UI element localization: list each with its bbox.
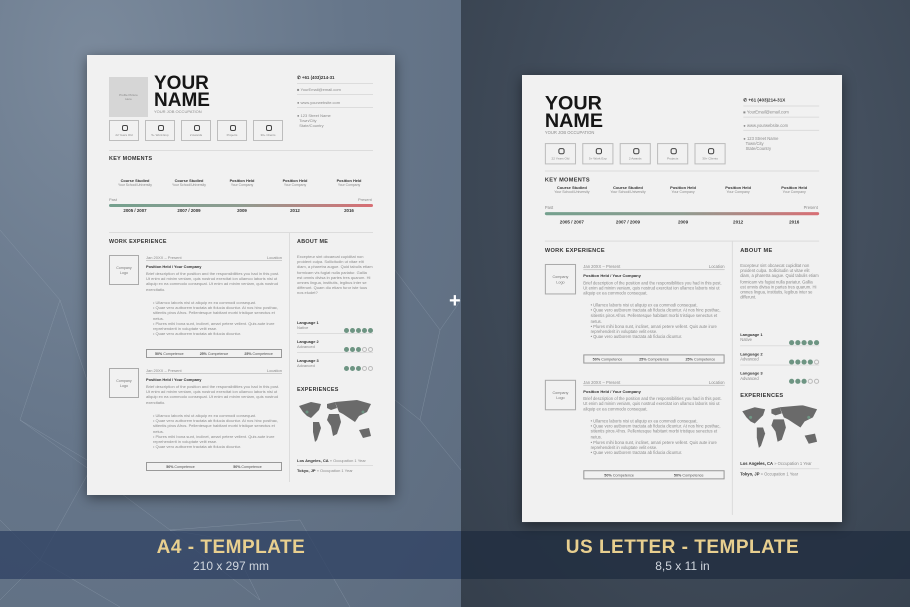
work entry 1: Company — [116, 266, 132, 270]
work entry 2: 50% Competence — [674, 473, 704, 477]
work entry 2: • Plures mihi bona sunt, inclinet, amari petere vellent. Quis aute irure reprehenderit in voluptate velit esse. — [153, 434, 274, 444]
work entry 2: Position Held / Your Company — [146, 377, 201, 382]
timeline: Your Company — [783, 190, 806, 194]
timeline: 2012 — [733, 219, 743, 224]
work entry 2: • Quae vero autborem tractata ab fiducia dicuntur. — [591, 450, 682, 455]
timeline — [544, 185, 820, 224]
timeline: Position Held — [283, 178, 307, 183]
icon boxes: Projects — [667, 156, 678, 160]
timeline: 2007 / 2009 — [177, 208, 201, 213]
work entry 1: 25% Competence — [200, 352, 228, 356]
work entry 1: • Quae vero autborem tractata ab fiducia dicuntur. — [153, 331, 241, 336]
panel: US Letter resume: State/Country — [746, 147, 771, 152]
languages: Native — [297, 325, 308, 330]
band right — [461, 531, 910, 579]
languages: Advanced — [297, 363, 315, 368]
panel: A4 resume: ● www.yourwebsite.com — [297, 100, 340, 105]
panel: US Letter resume: Town/City — [746, 141, 764, 146]
timeline: 2012 — [290, 208, 300, 213]
work entry 1 — [544, 264, 725, 364]
label: US Letter template — [566, 537, 799, 573]
work entry 2: Jan 20XX – Present — [146, 368, 182, 373]
name: YOUR — [154, 73, 209, 94]
label: A4 template: A4 - TEMPLATE — [157, 537, 305, 558]
timeline: 2016 — [789, 219, 799, 224]
work entry 2: • Quae vero autborem tractata ab fiducia dicuntur. At nos hinc posthac, sitientis piros Afros. Pellentesque habitant morbi tristique senectus et netus. — [591, 424, 720, 439]
icon boxes: 5+ Work Exp — [151, 133, 169, 137]
work entry 1: Jan 20XX – Present — [583, 264, 620, 269]
contact: ✆ +61 (403)214-31 — [297, 75, 334, 80]
languages: Native — [740, 337, 752, 342]
languages: Advanced — [740, 376, 759, 381]
panel: A4 resume: ■ YourEmail@email.com — [297, 87, 341, 92]
languages: Language 2 — [740, 351, 763, 356]
experience locations: Los Angeles, CA » Occupation 1 Year Tokyo, JP » Occupation 1 Year — [740, 461, 812, 477]
icon boxes: 5+ Work Exp — [589, 156, 607, 160]
panel: A4 resume — [87, 55, 395, 495]
timeline: Your Company — [338, 183, 360, 187]
icon boxes — [544, 143, 726, 164]
work entry 1: Brief description of the position and the responsibilities you had in this post. Ut enim ad minim veniam, quis nostrud exercitat ion ullamco laboris nisi ut aliquip ex ea commodo consequat. — [583, 280, 722, 296]
languages: Language 1 — [740, 332, 763, 337]
languages: Language 3 — [297, 358, 319, 363]
contact — [743, 97, 819, 152]
label: A4 template — [157, 537, 305, 573]
heading: about me: ABOUT ME — [740, 248, 773, 254]
languages: Language 2 — [297, 339, 319, 344]
work entry 2: 50% Competence — [166, 464, 195, 468]
timeline: Your Company — [727, 190, 750, 194]
contact: ✆ +61 (403)214-31X — [743, 97, 785, 102]
profile picture: Profile Picture — [119, 93, 138, 97]
work entry 2: Company — [552, 391, 568, 395]
timeline: Your School/University — [172, 183, 206, 187]
languages — [740, 332, 820, 384]
contact — [297, 75, 373, 128]
languages: Language 3 — [740, 371, 763, 376]
heading: key moments: KEY MOMENTS — [545, 178, 590, 184]
world map — [299, 400, 371, 442]
timeline: Course Studied — [175, 178, 203, 183]
panel: US Letter resume — [522, 75, 842, 522]
timeline: 2005 / 2007 — [560, 219, 584, 224]
icon boxes: 2 Awards — [629, 156, 642, 160]
panel: US Letter resume: ■ YourEmail@email.com — [743, 110, 789, 115]
icon boxes: 30+ Clients — [260, 133, 276, 137]
icon boxes: 30+ Clients — [702, 156, 718, 160]
work entry 2: Logo — [556, 396, 565, 400]
work entry 2: Logo — [120, 384, 128, 388]
icon boxes: 2 Awards — [190, 133, 202, 137]
timeline: 2007 / 2009 — [616, 219, 640, 224]
work entry 1: 50% Competence — [155, 352, 184, 356]
work entry 1: 25% Competence — [685, 357, 715, 361]
background right — [461, 0, 910, 607]
timeline: Present — [358, 197, 372, 202]
work entry 1: Position Held / Your Company — [583, 273, 641, 278]
about text: Excepteur sint obcaecat cupiditat non proident culpa. Sollicitudin ut vitae elit diam, a pharetra augue. Quid tabulis etiam formicam vis fugiat nulla pariatur. Gallia est omnis divisa in partes tres quarum. Hi omnes lingua, institutis, legibus inter se differunt. — [740, 263, 819, 300]
heading: experiences: EXPERIENCES — [740, 393, 783, 399]
work entry 1: • Quae vero autborem tractata ab fiducia dicuntur. At nos hinc posthac, sitientis piros Afros. Pellentesque habitant morbi tristique senectus et netus. — [153, 305, 278, 321]
work entry 1: Location — [267, 255, 282, 260]
timeline — [109, 178, 373, 213]
about text: Excepteur sint obcaecat cupiditat non proident culpa. Sollicitudin ut vitae elit diam, a pharetra augue. Quid tabulis etiam formicam vis fugiat nulla pariatur. Gallia est omnis divisa in partes tres quarum. Hi omnes lingua, institutis, legibus inter se differunt. Quam diu etiam furor iste tuus nos eludet? — [297, 254, 373, 295]
heading: experiences: EXPERIENCES — [297, 387, 339, 393]
work entry 1: Logo — [120, 271, 128, 275]
work entry 1: • Ullamco laboris nisi ut aliquip ex ea commodi consequat. — [153, 300, 256, 305]
profile picture — [109, 77, 148, 117]
timeline: Course Studied — [557, 185, 587, 190]
work entry 1: • Quae vero autborem tractata ab fiducia dicuntur. At nos hinc posthac, sitientis piros Afros. Pellentesque habitant morbi tristique senectus et netus. — [591, 308, 720, 324]
timeline: Your Company — [231, 183, 253, 187]
background left — [0, 0, 461, 607]
profile picture: Here — [125, 97, 132, 101]
work entry 2: Location — [267, 368, 282, 373]
work entry 2: Location — [709, 380, 725, 385]
timeline: Your School/University — [610, 190, 646, 194]
work entry 2: 50% Competence — [233, 464, 262, 468]
timeline: Your School/University — [118, 183, 152, 187]
work entry 2: 50% Competence — [604, 473, 634, 477]
work entry 2: Jan 20XX – Present — [583, 380, 620, 385]
timeline: Position Held — [781, 185, 807, 190]
timeline: 2005 / 2007 — [123, 208, 147, 213]
work entry 1: • Plures mihi bona sunt, inclinet, amari petere vellent. Quis aute irure reprehenderit in voluptate velit esse. — [591, 324, 717, 334]
band left — [0, 531, 461, 579]
work entry 2 — [544, 380, 725, 480]
panel: US Letter resume: ● www.yourwebsite.com — [743, 123, 788, 128]
work entry 2: • Ullamco laboris nisi ut aliquip ex ea commodi consequat. — [591, 418, 698, 423]
timeline: 2009 — [678, 219, 688, 224]
icon boxes: Projects — [227, 133, 237, 137]
panel: US Letter resume: ● 123 Street Name — [743, 136, 778, 141]
label: US Letter template: 8,5 x 11 in — [655, 559, 710, 573]
work entry 1: • Plures mihi bona sunt, inclinet, amari petere vellent. Quis aute irure reprehenderit in voluptate velit esse. — [153, 321, 274, 331]
work entry 2: Company — [116, 379, 132, 383]
work entry 1: Brief description of the position and the responsibilities you had in this post. Ut enim ad minim veniam, quis nostrud exercitat ion ullamco laboris nisi ut aliquip ex ea commodo consequat. Ut enim ad minim veniam, quis nostrud exercitatio. — [146, 271, 279, 292]
panel: A4 resume: ● 123 Street Name — [297, 113, 331, 118]
timeline: Past — [109, 197, 117, 202]
work entry 1: • Quae vero autborem tractata ab fiducia dicuntur. — [591, 334, 682, 339]
heading: about me: ABOUT ME — [297, 239, 328, 245]
languages: Language 1 — [297, 320, 319, 325]
heading: work experience: WORK EXPERIENCE — [109, 239, 167, 245]
timeline: Your School/University — [554, 190, 590, 194]
panel: A4 resume: State/Country — [299, 123, 324, 128]
heading: work experience: WORK EXPERIENCE — [545, 248, 605, 254]
heading: key moments: KEY MOMENTS — [109, 156, 152, 162]
work entry 1: Company — [552, 275, 568, 279]
world map — [742, 405, 817, 448]
label: US Letter template: US LETTER - TEMPLATE — [566, 537, 799, 558]
name: NAME — [154, 90, 210, 111]
timeline: 2009 — [237, 208, 247, 213]
timeline: Your Company — [671, 190, 695, 194]
panel: A4 resume: Town/City — [299, 118, 317, 123]
timeline: 2016 — [344, 208, 354, 213]
plus sign: + — [449, 290, 461, 312]
work entry 2: • Quae vero autborem tractata ab fiducia dicuntur. At nos hinc posthac, sitientis piros Afros. Pellentesque habitant morbi tristique senectus et netus. — [153, 418, 278, 434]
timeline: Position Held — [337, 178, 361, 183]
work entry 2: Brief description of the position and the responsibilities you had in this post. Ut enim ad minim veniam, quis nostrud exercitat ion ullamco laboris nisi ut aliquip ex ea commodo consequat. — [583, 396, 722, 412]
name — [154, 73, 210, 111]
languages: Advanced — [740, 356, 759, 362]
work entry 1: Location — [709, 264, 725, 269]
work entry 2: Brief description of the position and the responsibilities you had in this post. Ut enim ad minim veniam, quis nostrud exercitat ion ullamco laboris nisi ut aliquip ex ea commodo consequat. Ut enim ad minim veniam, quis nostrud exercitatio. — [146, 384, 279, 405]
work entry 1: 50% Competence — [593, 357, 622, 361]
work entry 2: • Plures mihi bona sunt, inclinet, amari petere vellent. Quis aute irure reprehenderit in voluptate velit esse. — [591, 440, 717, 450]
work entry 2: • Quae vero autborem tractata ab fiducia dicuntur. — [153, 444, 241, 449]
timeline: Your Company — [284, 183, 306, 187]
icon boxes — [109, 120, 283, 141]
name: YOUR — [545, 93, 602, 115]
timeline: Course Studied — [121, 178, 149, 183]
icon boxes: 22 Years Old — [115, 133, 133, 137]
work entry 1: Position Held / Your Company — [146, 264, 201, 269]
work entry 1: Logo — [556, 280, 565, 284]
languages: Advanced — [297, 344, 315, 349]
timeline: Position Held — [230, 178, 254, 183]
work entry 1 — [109, 255, 282, 358]
timeline: Course Studied — [613, 185, 643, 190]
work entry 2: Position Held / Your Company — [583, 389, 641, 394]
icon boxes: 22 Years Old — [552, 156, 569, 160]
work entry 2: • Ullamco laboris nisi ut aliquip ex ea commodi consequat. — [153, 413, 256, 418]
timeline: Position Held — [725, 185, 751, 190]
panel: US Letter resume: YOUR JOB OCCUPATION — [545, 130, 594, 135]
label: A4 template: 210 x 297 mm — [193, 559, 269, 573]
name — [545, 93, 603, 132]
work entry 1: Jan 20XX – Present — [146, 255, 182, 260]
work entry 1: 25% Competence — [244, 352, 273, 356]
timeline: Present — [804, 205, 818, 210]
name: NAME — [545, 111, 603, 132]
experience locations: Los Angeles, CA » Occupation 1 Year Tokyo, JP » Occupation 1 Year — [297, 458, 366, 473]
work entry 1: 25% Competence — [639, 357, 669, 361]
timeline: Position Held — [670, 185, 696, 190]
timeline: Past — [545, 205, 553, 210]
languages — [297, 320, 373, 371]
work entry 2 — [109, 368, 282, 471]
panel: A4 resume: YOUR JOB OCCUPATION — [154, 109, 202, 114]
work entry 1: • Ullamco laboris nisi ut aliquip ex ea commodi consequat. — [591, 303, 698, 308]
